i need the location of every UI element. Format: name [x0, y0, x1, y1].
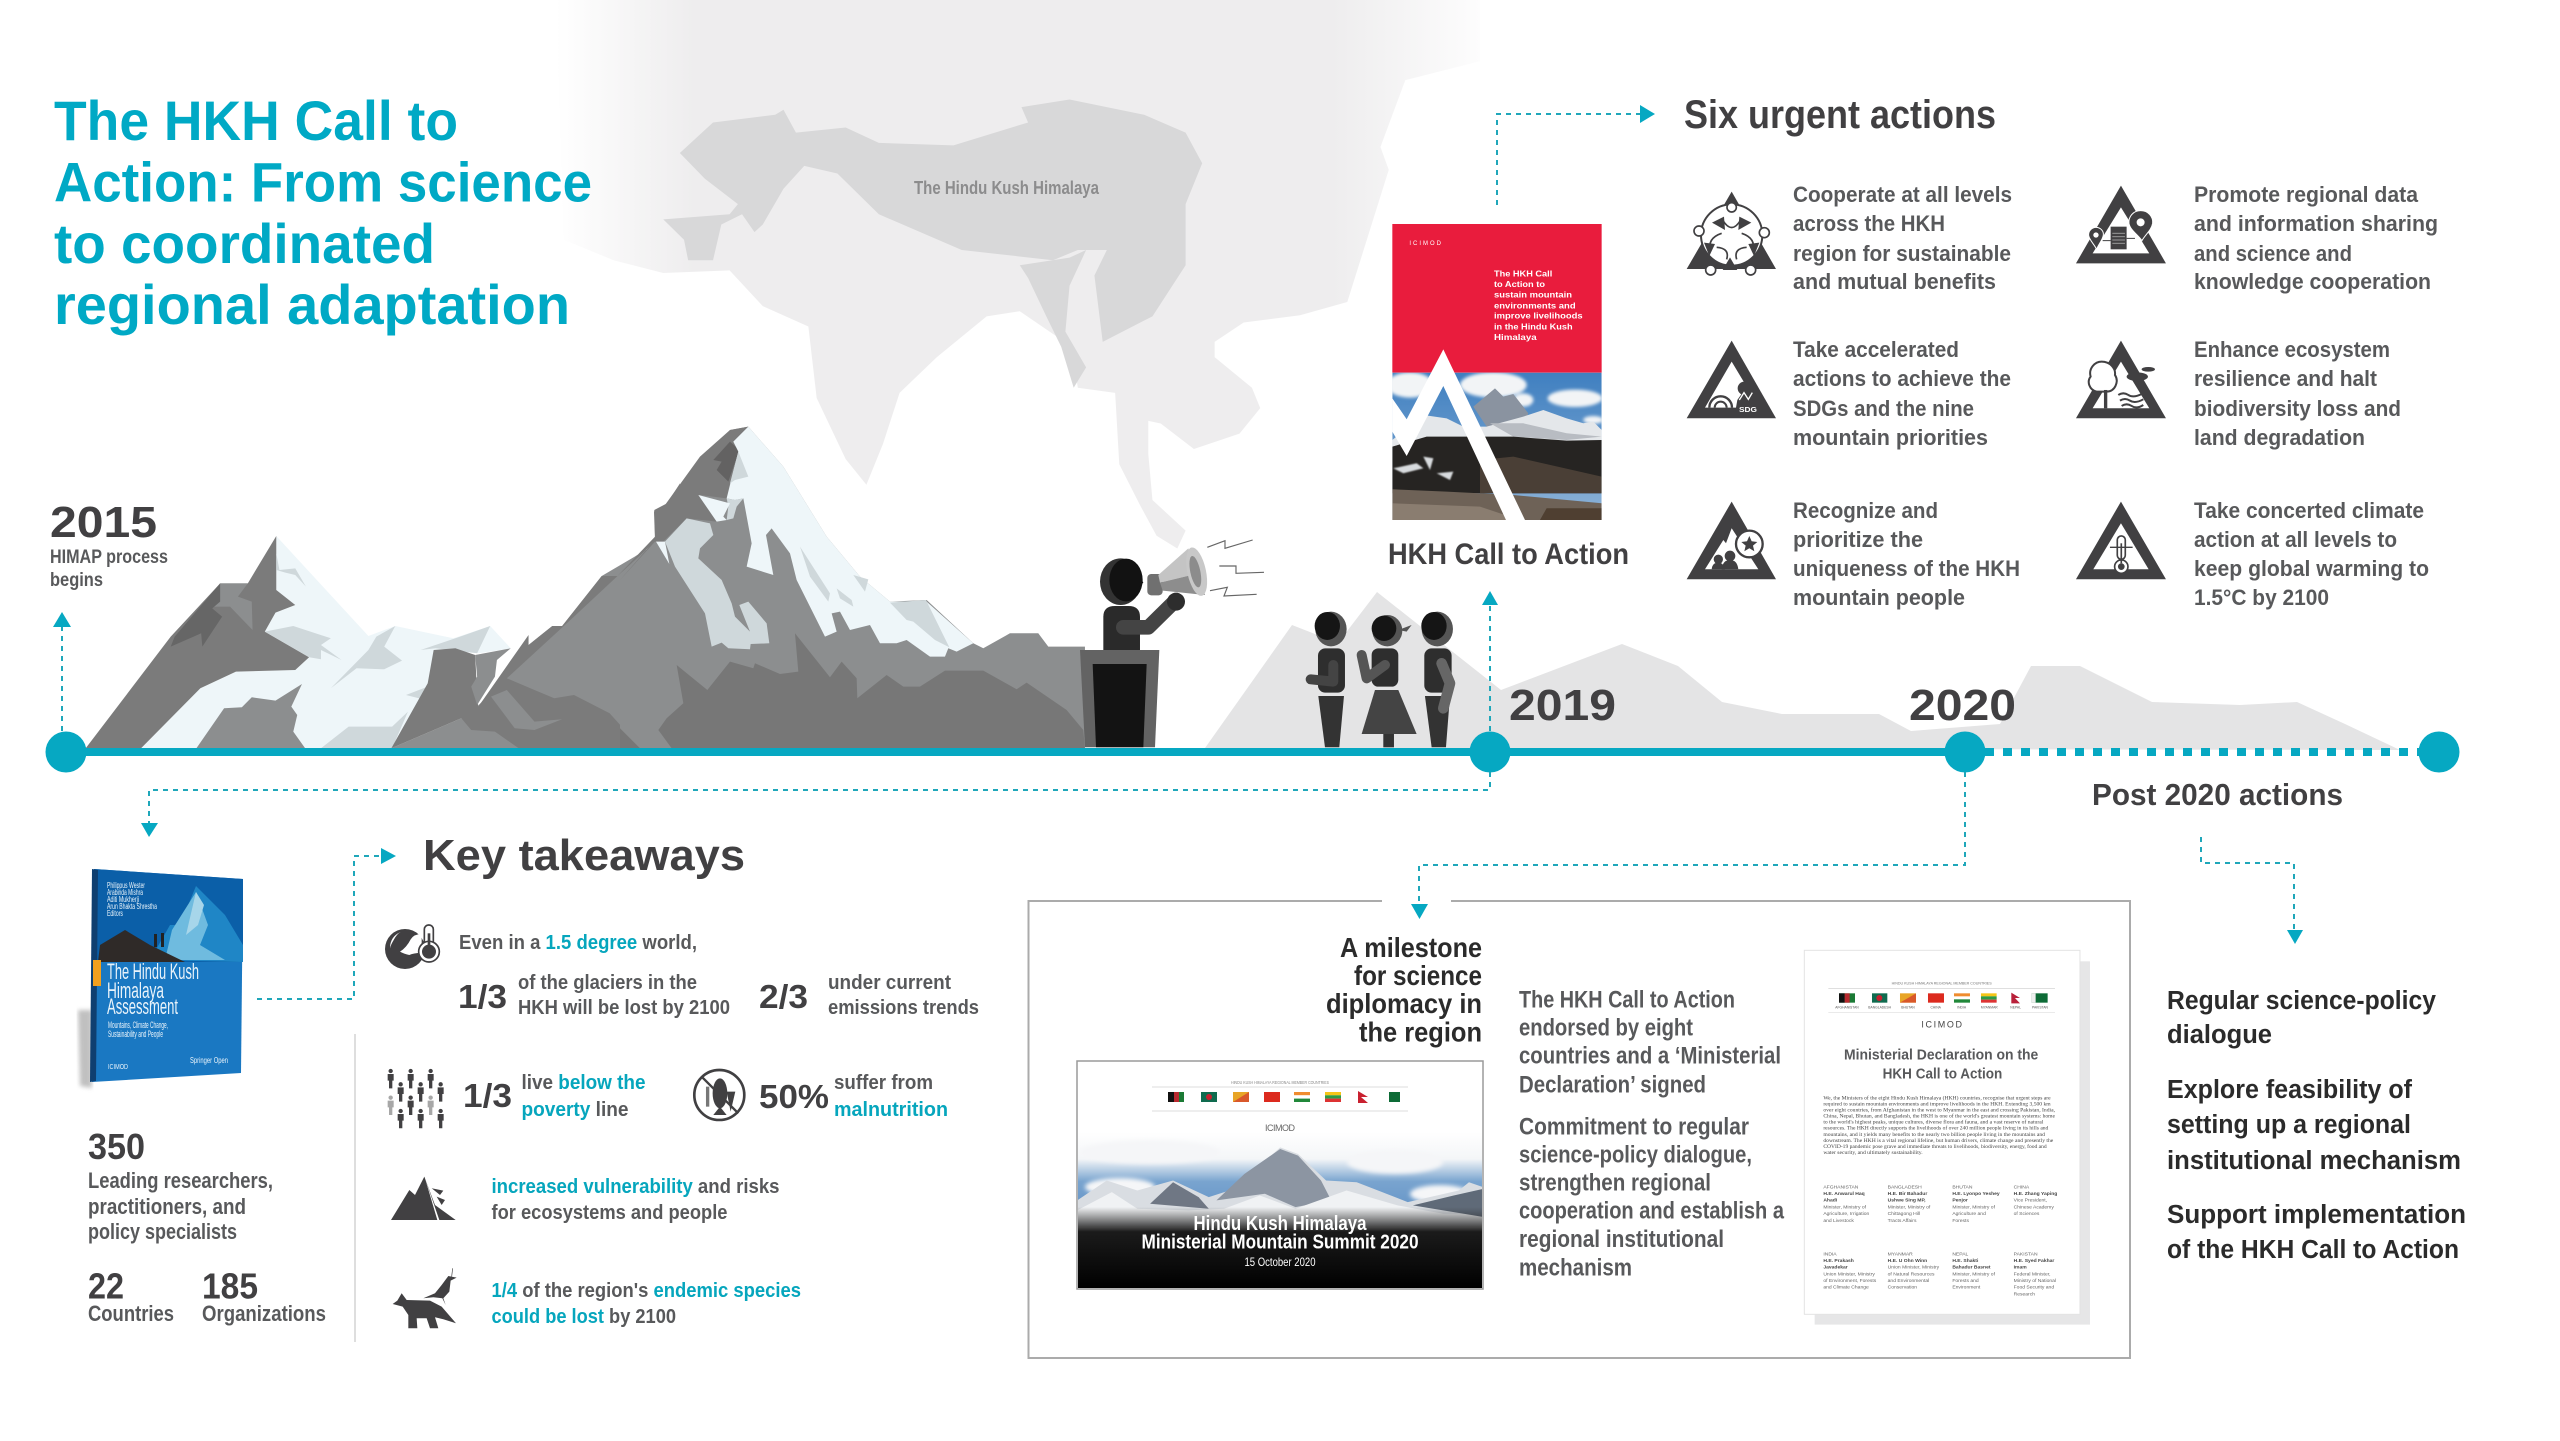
takeaway: vulnerability: for ecosystems and people: [492, 1202, 728, 1224]
post 2020 actions list: Explore feasibility of: [2167, 1076, 2412, 1104]
milestone description: regional institutional: [1519, 1226, 1724, 1253]
ministerial declaration document: over eight countries, from Afghanistan in the west to Myanmar in the east and crossing Pakistan, India,: [1823, 1109, 2055, 1114]
book: HKH Call to Action: to Action to: [1494, 279, 1545, 289]
ministerial declaration document: BANGLADESH: [1868, 1005, 1892, 1009]
ministerial declaration document: Minister, Ministry of: [1952, 1204, 1996, 1210]
action 6: 1.5°C by 2100: [2194, 585, 2329, 610]
ministerial declaration document: AFGHANISTAN: [1835, 1005, 1859, 1009]
takeaway: vulnerability: [391, 1176, 780, 1224]
action 4: Promote regional data: [2194, 182, 2418, 207]
action 4: and science and: [2194, 241, 2352, 266]
milestone description: strengthen regional: [1519, 1170, 1711, 1196]
three listeners: [1311, 612, 1453, 747]
icon: mountain rockfall: [391, 1177, 456, 1220]
milestone heading: the region: [1359, 1016, 1482, 1048]
action 2: SDGs and the nine: [1793, 396, 1974, 421]
ministerial declaration document: of Environment, Forests: [1823, 1278, 1877, 1284]
sound bolts: [1207, 540, 1264, 596]
milestone description: endorsed by eight: [1519, 1014, 1693, 1042]
ministerial declaration document: of Sciences: [2014, 1211, 2040, 1217]
map: South and East Asia: [555, 0, 1480, 548]
book: HKH Call to Action: [1387, 224, 1603, 520]
year 2019: 2019: [1509, 681, 1616, 730]
ministerial declaration document: water security, and ultimately sustainability.: [1823, 1151, 1923, 1156]
action 3: [1687, 498, 2020, 610]
action 4: [2076, 182, 2438, 294]
ministerial declaration document: H.E. Zhang Yaping: [2014, 1191, 2057, 1197]
ministerial declaration document: Ahadi: [1823, 1198, 1838, 1204]
takeaway: poverty: poverty line: [522, 1099, 628, 1121]
action 5: Enhance ecosystem: [2194, 337, 2390, 362]
arrow: book to six urgent actions: [1497, 105, 1655, 205]
action 5: [2076, 337, 2401, 450]
ministerial declaration document: Imam: [2014, 1265, 2027, 1271]
arrow: 2015 up: [53, 612, 71, 731]
action 3: uniqueness of the HKH: [1793, 556, 2020, 581]
ministerial declaration document: PAKISTAN: [2032, 1005, 2049, 1009]
ministerial declaration document: Agriculture and: [1952, 1211, 1986, 1217]
milestone description: science-policy dialogue,: [1519, 1142, 1752, 1168]
ministerial declaration document: Federal Minister,: [2014, 1271, 2050, 1277]
action 1: [1687, 182, 2012, 294]
ministerial declaration document: Bahadur Basnet: [1952, 1265, 1991, 1271]
title: Action: From science: [54, 150, 592, 214]
action 4: knowledge cooperation: [2194, 269, 2431, 294]
action 5: biodiversity loss and: [2194, 396, 2401, 421]
icon: data sharing: [2076, 186, 2166, 263]
icon: climate thermometer: [2076, 502, 2166, 579]
ministerial declaration document: Agriculture, Irrigation: [1823, 1211, 1870, 1217]
book: HKH Call to Action: Himalaya: [1494, 332, 1537, 342]
takeaway: malnutrition: malnutrition: [834, 1099, 948, 1121]
action 3: mountain people: [1793, 585, 1965, 610]
heading: Key takeaways: Key takeaways: [423, 831, 745, 880]
milestone heading: diplomacy in: [1326, 988, 1482, 1019]
year 2020: 2020: [1909, 681, 2016, 730]
ministerial declaration document: ICIMOD: [1921, 1019, 1962, 1029]
map label: The Hindu Kush Himalaya: [914, 178, 1100, 198]
ministerial declaration document: Research: [2014, 1291, 2035, 1297]
arrow: 2019 to assessment book: [141, 772, 1490, 837]
post 2020 actions list: of the HKH Call to Action: [2167, 1236, 2459, 1264]
takeaway: glaciers: emissions trends: [828, 997, 979, 1019]
summit slide image: ICIMOD: [1265, 1123, 1296, 1133]
caption: HKH Call to Action: HKH Call to Action: [1388, 538, 1629, 571]
book: The Hindu Kush Himalaya Assessment: Arabinda Mishra: [107, 888, 143, 897]
left snow mountain: [86, 483, 680, 748]
book: HKH Call to Action: The HKH Call: [1494, 269, 1552, 279]
book: The Hindu Kush Himalaya Assessment: Sustainability and People: [108, 1029, 163, 1039]
ministerial declaration document: CHINA: [2014, 1184, 2030, 1190]
ministerial declaration document: INDIA: [1823, 1251, 1837, 1257]
post 2020 actions list: [2167, 987, 2466, 1264]
ministerial declaration document: HKH Call to Action: [1883, 1067, 2002, 1083]
action 6: keep global warming to: [2194, 556, 2429, 581]
ministerial declaration document: Minister, Ministry of: [1823, 1204, 1867, 1210]
icon: ecosystem: [2076, 341, 2166, 418]
ministerial declaration document: NEPAL: [1952, 1251, 1969, 1257]
action 6: action at all levels to: [2194, 527, 2397, 552]
ministerial declaration document: MYANMAR: [1981, 1005, 1998, 1009]
book: The Hindu Kush Himalaya Assessment: Mountains, Climate Change,: [108, 1020, 168, 1030]
assessment stats: Countries: [88, 1301, 174, 1326]
ministerial declaration document: H.E. U Ohn Winn: [1888, 1258, 1927, 1264]
ministerial declaration document: mountains, and it yields many benefits to the nearly two billion people living in the mountains and: [1823, 1133, 2046, 1138]
action 2: [1687, 337, 2011, 450]
action 5: land degradation: [2194, 425, 2365, 450]
ministerial declaration document: BANGLADESH: [1888, 1184, 1922, 1190]
ministerial declaration document: PAKISTAN: [2014, 1251, 2038, 1257]
ministerial declaration document: CHINA: [1930, 1005, 1942, 1009]
ministerial declaration document: Javadekar: [1823, 1265, 1848, 1271]
ministerial declaration document: Forests and: [1952, 1278, 1979, 1284]
action 6: [2076, 498, 2429, 610]
book: The Hindu Kush Himalaya Assessment: Philippus Wester: [107, 881, 145, 890]
takeaway: glaciers: 1/3: [458, 978, 507, 1015]
action 1: region for sustainable: [1793, 241, 2011, 266]
post 2020 actions list: dialogue: [2167, 1021, 2272, 1049]
book: The Hindu Kush Himalaya Assessment: Himalaya: [107, 978, 164, 1003]
summit slide image: [1077, 1061, 1483, 1289]
book: The Hindu Kush Himalaya Assessment: The Hindu Kush: [107, 959, 199, 984]
ministerial declaration document: and Climate Change: [1823, 1285, 1869, 1291]
milestone description: mechanism: [1519, 1254, 1632, 1282]
listener 2: [1362, 615, 1417, 747]
ministerial declaration document: H.E. Bir Bahadur: [1888, 1191, 1927, 1197]
takeaway: glaciers: 2/3: [759, 978, 808, 1015]
ministerial declaration document: We, the Ministers of the eight Hindu Kush Himalaya (HKH) countries, recognise that urgent steps are: [1823, 1096, 2052, 1101]
takeaway: malnutrition: suffer from: [834, 1072, 933, 1094]
takeaway: endemic species: 1/4 of the region's endemic species: [492, 1280, 801, 1302]
ministerial declaration document: Food Security and: [2014, 1285, 2054, 1291]
ministerial declaration document: Environment: [1952, 1285, 1981, 1291]
takeaway: poverty: live below the: [522, 1072, 646, 1094]
ministerial declaration document: Forests: [1952, 1218, 1969, 1224]
takeaway: glaciers: Even in a 1.5 degree world,: [459, 932, 697, 954]
action 2: mountain priorities: [1793, 425, 1988, 450]
ministerial declaration document: MYANMAR: [1888, 1251, 1913, 1257]
takeaway: glaciers: of the glaciers in the: [518, 972, 697, 994]
title: The HKH Call to: [54, 89, 458, 152]
ministerial declaration document: Minister, Ministry of: [1888, 1204, 1931, 1210]
takeaway: poverty: [388, 1069, 646, 1128]
ministerial declaration document: Ushwe Sing MP,: [1888, 1198, 1926, 1204]
listener 1: [1311, 612, 1347, 747]
title: [54, 89, 592, 336]
ministerial declaration document: BHUTAN: [1952, 1184, 1973, 1190]
book: HKH Call to Action: ICIMOD: [1409, 241, 1442, 247]
ministerial declaration document: [1804, 950, 2090, 1325]
ministerial declaration document: required to sustain mountain environments and improve livelihoods in the HKH. Extending 3,500 km: [1823, 1103, 2051, 1108]
milestone description: cooperation and establish a: [1519, 1198, 1785, 1224]
ministerial declaration document: Chinese Academy: [2014, 1204, 2054, 1210]
action 1: Cooperate at all levels: [1793, 182, 2012, 207]
icon: no food: [694, 1070, 744, 1120]
megaphone: [1147, 546, 1211, 598]
arrow: 2020 to milestone panel: [1411, 772, 1965, 919]
post 2020 label: Post 2020 actions: [2092, 777, 2343, 812]
ministerial declaration document: Minister, Ministry of: [1952, 1271, 1996, 1277]
book: The Hindu Kush Himalaya Assessment: Editors: [107, 909, 123, 918]
arrow: 2019 up to call to action: [1482, 591, 1498, 731]
timeline: [46, 732, 2460, 772]
ministerial declaration document: HINDU KUSH HIMALAYA REGIONAL MEMBER COUNTRIES: [1892, 981, 1992, 985]
heading: Six urgent actions: Six urgent actions: [1684, 93, 1996, 137]
assessment stats: policy specialists: [88, 1219, 237, 1244]
action 2: actions to achieve the: [1793, 366, 2011, 391]
book: HKH Call to Action: improve livelihoods: [1494, 311, 1583, 321]
takeaway: endemic species: [393, 1268, 801, 1328]
panel: milestone for science diplomacy: [1028, 901, 2130, 1358]
ministerial declaration document: H.E. Lyonpo Yeshey: [1952, 1191, 2000, 1197]
post 2020 actions list: Regular science-policy: [2167, 987, 2437, 1015]
milestone description: Commitment to regular: [1519, 1114, 1749, 1140]
icon: crowd of people: [388, 1069, 444, 1128]
assessment stats: Leading researchers,: [88, 1168, 273, 1193]
milestone description: Declaration’ signed: [1519, 1072, 1706, 1098]
milestone heading: A milestone: [1340, 932, 1482, 963]
background mountains, right: [1205, 592, 2400, 750]
year 2015: 2015: [50, 498, 157, 547]
takeaway: endemic species: could be lost by 2100: [492, 1306, 676, 1328]
milestone heading: [1326, 932, 1482, 1048]
assessment stats: 350: [88, 1126, 145, 1167]
takeaway: malnutrition: 50%: [759, 1078, 829, 1115]
action 4: and information sharing: [2194, 211, 2438, 236]
icon: cooperation: [1687, 192, 1776, 275]
year 2015: [50, 498, 168, 591]
book: HKH Call to Action: environments and: [1494, 300, 1576, 310]
post 2020 actions list: Support implementation: [2167, 1201, 2466, 1229]
book: The Hindu Kush Himalaya Assessment: Assessment: [107, 994, 178, 1019]
ministerial declaration document: China, Nepal, Bhutan, and Bangladesh, the HKH is one of the world's greatest mountain systems: home: [1823, 1115, 2056, 1120]
icon: SDG mountain: [1687, 341, 1776, 418]
ministerial declaration document: Vice President,: [2014, 1198, 2047, 1204]
icon: fox and peacock: [393, 1268, 457, 1328]
ministerial declaration document: COVID-19 pandemic pose grave and immediate threats to livelihoods, biodiversity, energy, food and: [1823, 1145, 2047, 1150]
takeaway: glaciers: HKH will be lost by 2100: [518, 997, 730, 1019]
ministerial declaration document: BHUTAN: [1901, 1005, 1915, 1009]
milestone heading: for science: [1354, 960, 1482, 991]
ministerial declaration document: to the world's highest peaks, unique cultures, diverse flora and fauna, and a vast reserve of natural: [1823, 1121, 2044, 1126]
assessment stats: Organizations: [202, 1301, 326, 1326]
ministerial declaration document: and Environmental: [1888, 1278, 1929, 1284]
book: The Hindu Kush Himalaya Assessment: Springer Open: [190, 1056, 228, 1065]
summit slide image: Hindu Kush Himalaya: [1194, 1212, 1367, 1235]
ministerial declaration document: Conservation: [1888, 1285, 1917, 1291]
arrow: book to key takeaways: [257, 848, 396, 999]
action 3: prioritize the: [1793, 527, 1923, 552]
action 3: Recognize and: [1793, 498, 1938, 523]
podium: [1080, 650, 1159, 747]
icon: globe and thermometer: [385, 925, 439, 969]
action 5: resilience and halt: [2194, 366, 2377, 391]
map: Hindu Kush Himalaya region: [663, 99, 1202, 388]
takeaway: poverty: 1/3: [463, 1077, 512, 1114]
assessment stats: 185: [202, 1266, 258, 1306]
ministerial declaration document: Chittagong Hill: [1888, 1211, 1920, 1217]
book: HKH Call to Action: in the Hindu Kush: [1494, 321, 1573, 331]
year 2015: begins: [50, 570, 103, 591]
ministerial declaration document: Penjor: [1952, 1198, 1968, 1204]
six urgent actions list: [1687, 182, 2438, 610]
country flags: [1168, 1091, 1400, 1103]
assessment stats: [88, 1126, 326, 1326]
takeaway: malnutrition: [694, 1070, 948, 1121]
takeaway: glaciers: under current: [828, 972, 951, 994]
ministerial declaration document: of Natural Resources: [1888, 1271, 1935, 1277]
main snow mountain: [620, 427, 1085, 748]
action 6: Take concerted climate: [2194, 498, 2424, 523]
ministerial declaration document: Ministry of National: [2014, 1278, 2056, 1284]
book: The Hindu Kush Himalaya Assessment: Aditi Mukherji: [107, 895, 139, 904]
ministerial declaration document: and Livestock: [1823, 1218, 1854, 1224]
ministerial declaration document: NEPAL: [2010, 1005, 2021, 1009]
takeaway: vulnerability: increased vulnerability and risks: [492, 1176, 780, 1198]
ministerial declaration document: downstream. The HKH is a vital regional lifeline, but human drivers, climate change and presently the: [1823, 1139, 2054, 1144]
milestone description: The HKH Call to Action: [1519, 986, 1735, 1014]
ministerial declaration document: Union Minister, Ministry: [1888, 1265, 1940, 1271]
speaker: [1100, 558, 1185, 650]
book: HKH Call to Action: sustain mountain: [1494, 290, 1572, 300]
ministerial declaration document: H.E. Anwarul Haq: [1823, 1191, 1865, 1197]
summit slide image: 15 October 2020: [1244, 1255, 1316, 1269]
ministerial declaration document: INDIA: [1957, 1005, 1967, 1009]
action 2: Take accelerated: [1793, 337, 1959, 362]
ministerial declaration document: H.E. Prakash: [1823, 1258, 1854, 1264]
ministerial declaration document: H.E. Shakti: [1952, 1258, 1979, 1264]
ministerial declaration document: Union Minister, Ministry: [1823, 1271, 1875, 1277]
title: to coordinated: [54, 212, 435, 275]
book: The Hindu Kush Himalaya Assessment: ICIMOD: [108, 1064, 128, 1071]
listener 3: [1421, 612, 1453, 747]
title: regional adaptation: [54, 273, 570, 336]
book: The Hindu Kush Himalaya Assessment: Arun Bhakta Shrestha: [107, 902, 157, 911]
ministerial declaration document: AFGHANISTAN: [1823, 1184, 1859, 1190]
ministerial declaration document: Tracts Affairs: [1888, 1218, 1917, 1224]
icon: SDG mountain: SDG: [1739, 405, 1757, 414]
action 1: and mutual benefits: [1793, 269, 1996, 294]
icon: mountain people: [1687, 502, 1776, 579]
ministerial declaration document: resources. The HKH directly supports the livelihoods of over 240 million people living in its hills and: [1823, 1127, 2049, 1132]
ministerial declaration document: Ministerial Declaration on the: [1844, 1047, 2038, 1063]
speaker at podium with megaphone: [1080, 540, 1264, 747]
action 1: across the HKH: [1793, 211, 1945, 236]
summit slide image: Ministerial Mountain Summit 2020: [1142, 1230, 1418, 1254]
milestone description: countries and a ‘Ministerial: [1519, 1042, 1781, 1070]
book: The Hindu Kush Himalaya Assessment: [78, 869, 243, 1088]
milestone description: [1519, 986, 1785, 1282]
assessment stats: practitioners, and: [88, 1194, 246, 1219]
summit slide image: HINDU KUSH HIMALAYA REGIONAL MEMBER COUNTRIES: [1231, 1080, 1329, 1085]
post 2020 actions list: setting up a regional: [2167, 1111, 2411, 1139]
takeaway: glaciers: [385, 925, 979, 1019]
ministerial declaration document: H.E. Syed Fakhar: [2014, 1258, 2054, 1264]
post 2020 actions list: institutional mechanism: [2167, 1147, 2461, 1175]
assessment stats: 22: [88, 1266, 124, 1306]
arrow: post 2020 to actions: [2201, 837, 2303, 944]
year 2015: HIMAP process: [50, 547, 168, 568]
